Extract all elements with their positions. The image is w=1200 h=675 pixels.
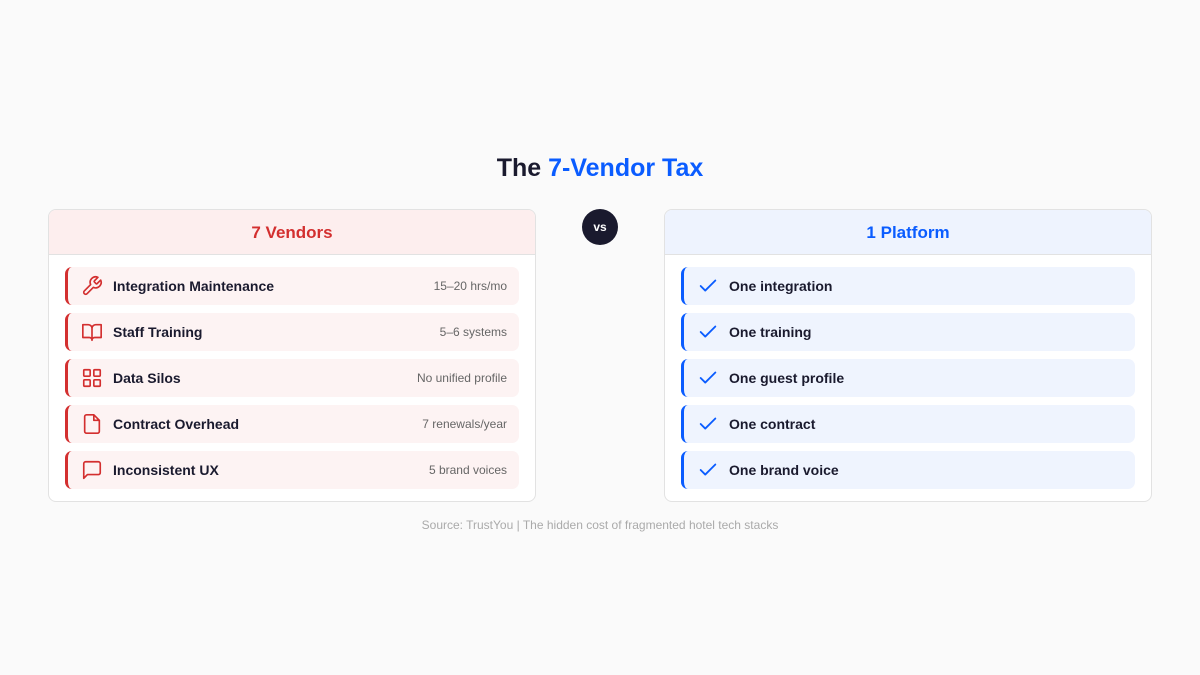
row: one training <box>681 313 1135 351</box>
panel: 7 vendors <box>48 209 536 502</box>
source note: Source: TrustYou | The hidden cost of fragmented hotel tech stacks <box>422 518 778 532</box>
row: staff training: Staff Training <box>113 324 202 340</box>
row: contract overhead <box>65 405 519 443</box>
header: 1 platform <box>665 210 1151 255</box>
row: inconsistent ux: 5 brand voices <box>429 463 507 477</box>
row: integration maintenance: 15–20 hrs/mo <box>434 279 507 293</box>
row: one contract: One contract <box>729 416 815 432</box>
row: inconsistent ux <box>65 451 519 489</box>
row: staff training: 5–6 systems <box>440 325 507 339</box>
row: one brand voice: One brand voice <box>729 462 839 478</box>
row: staff training <box>65 313 519 351</box>
row: contract overhead: Contract Overhead <box>113 416 239 432</box>
row: contract overhead: 7 renewals/year <box>422 417 507 431</box>
header: 7 vendors <box>49 210 535 255</box>
header: 1 platform: 1 Platform <box>866 223 950 242</box>
header: 7 vendors: 7 Vendors <box>251 223 333 242</box>
vs badge <box>582 209 618 245</box>
row: data silos: Data Silos <box>113 370 181 386</box>
title: The 7-Vendor Tax <box>497 154 703 182</box>
row: one guest profile <box>681 359 1135 397</box>
row: integration maintenance: Integration Maintenance <box>113 278 274 294</box>
panel: 1 platform <box>664 209 1152 502</box>
row: one contract <box>681 405 1135 443</box>
row: one brand voice <box>681 451 1135 489</box>
row: one guest profile: One guest profile <box>729 370 844 386</box>
row: one integration <box>681 267 1135 305</box>
row: inconsistent ux: Inconsistent UX <box>113 462 219 478</box>
row: integration maintenance <box>65 267 519 305</box>
vs badge: vs <box>593 220 607 234</box>
row: one training: One training <box>729 324 811 340</box>
row: data silos: No unified profile <box>417 371 507 385</box>
row: data silos <box>65 359 519 397</box>
row: one integration: One integration <box>729 278 832 294</box>
